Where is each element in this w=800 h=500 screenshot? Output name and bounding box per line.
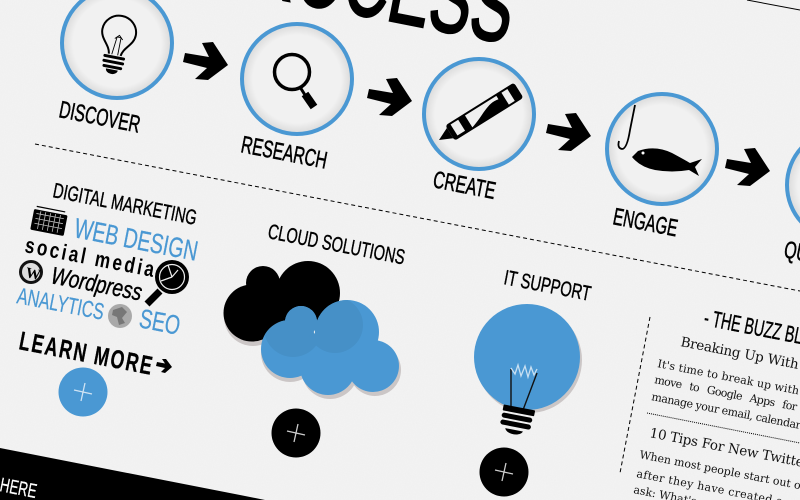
- text: web design: WEB DESIGN: [72, 212, 200, 267]
- step: qualify: [782, 130, 800, 276]
- icon: light bulb outline: [94, 13, 139, 77]
- cloud overlap shading: [264, 297, 363, 357]
- article title: breaking up: Breaking Up With: [679, 334, 800, 373]
- step: research: [239, 24, 352, 174]
- icon: crayon: [434, 83, 523, 148]
- circle: discover: [62, 0, 172, 98]
- text: learn more: LEARN MORE: [17, 326, 155, 380]
- footer band: [0, 448, 265, 500]
- icon: blue cloud: [261, 300, 399, 395]
- button: black plus: [272, 408, 320, 458]
- panel: it support: [474, 266, 593, 496]
- arrow 3: [546, 113, 591, 151]
- icon: fish hook: [618, 105, 635, 149]
- icon: black cloud: [224, 261, 340, 342]
- top right rule: [747, 0, 800, 10]
- article 2 text: When most people start out o: [638, 448, 800, 492]
- heading: it support: IT SUPPORT: [502, 266, 593, 306]
- step: engage: [607, 94, 717, 242]
- label: discover: DISCOVER: [57, 96, 143, 139]
- icon: magnifying glass: [274, 54, 314, 107]
- article 1 text: It's time to break up with: [656, 357, 800, 397]
- circle: engage: [607, 94, 717, 204]
- icon: wordpress: [19, 260, 43, 284]
- label: create: CREATE: [431, 166, 498, 205]
- circle: qualify: [787, 130, 800, 240]
- icon: globe: [108, 304, 132, 328]
- text: wordpress: Wordpress: [49, 262, 144, 306]
- panel: the buzz: [632, 304, 800, 500]
- icon: large bulb: [474, 304, 582, 437]
- article 1 text: manage your email, calendar: [650, 390, 800, 432]
- icon: keyboard: [30, 206, 68, 236]
- panel: cloud solutions: [224, 220, 407, 458]
- circle: research: [242, 24, 352, 134]
- panel: digital marketing: [15, 179, 200, 416]
- icon: black cloud shadow: [224, 288, 282, 346]
- step: discover: [57, 0, 172, 139]
- icon: wordpress: W: [24, 265, 42, 284]
- step: create: [424, 59, 534, 205]
- arrow 2: [367, 78, 412, 116]
- button: blue plus: [58, 368, 108, 416]
- label: engage: ENGAGE: [611, 203, 680, 242]
- arrow 1: [183, 42, 228, 80]
- circle: create: [424, 59, 534, 169]
- text: seo: SEO: [137, 303, 183, 340]
- article 1 text: [650, 357, 800, 432]
- icon: analytics magnifier: [147, 260, 189, 304]
- arrow 4: [725, 148, 770, 186]
- icon: fish: [632, 148, 702, 176]
- article 1 text: move to Google Apps for: [653, 373, 799, 414]
- text: social media: social media: [23, 233, 157, 283]
- heading: cloud solutions: CLOUD SOLUTIONS: [266, 220, 407, 269]
- heading: digital marketing: DIGITAL MARKETING: [51, 179, 199, 230]
- text: analytics: ANALYTICS: [15, 282, 106, 325]
- icon: blue cloud shadow: [261, 324, 401, 399]
- icon: small arrow: [156, 359, 172, 373]
- label: research: RESEARCH: [239, 131, 329, 174]
- button: black plus: [480, 448, 528, 496]
